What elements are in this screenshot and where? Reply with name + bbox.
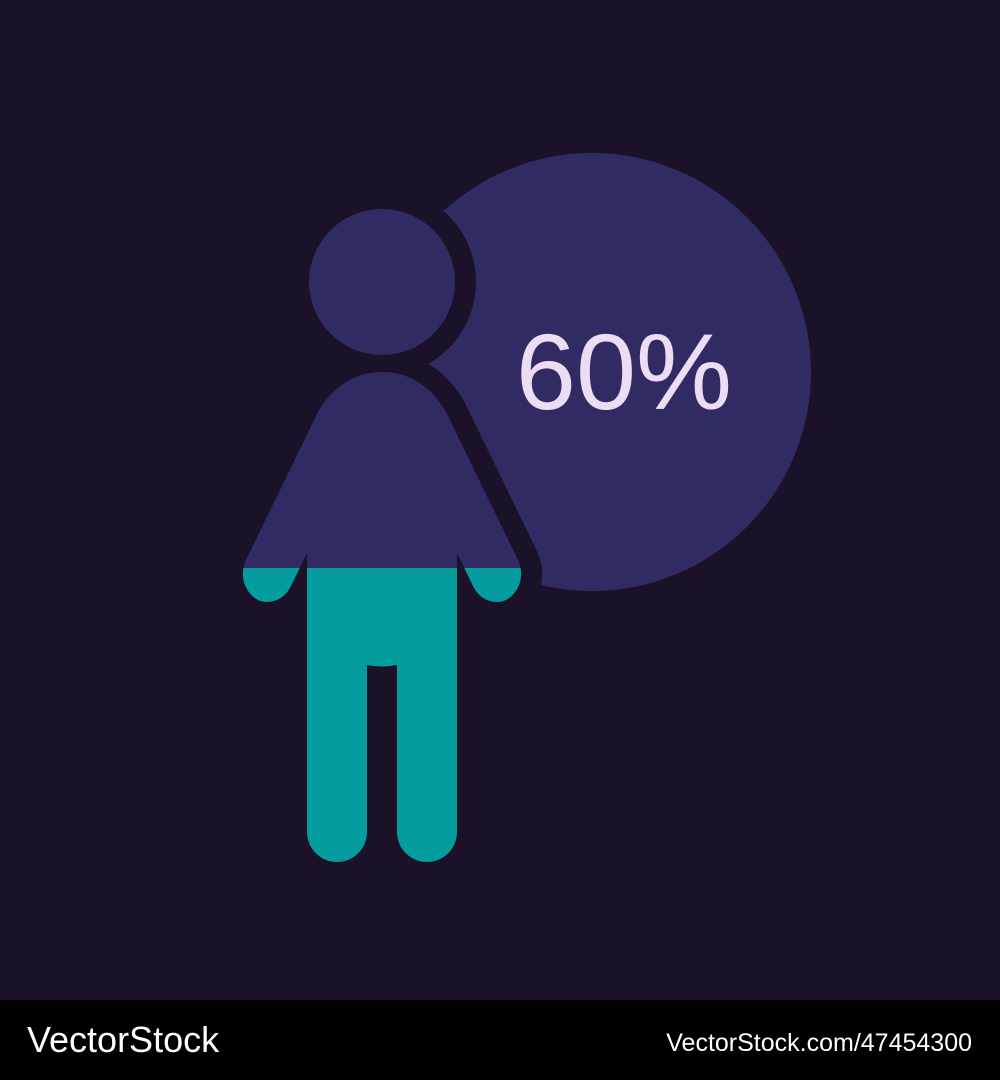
- footer bar: VectorStock: [27, 1019, 220, 1060]
- footer bar: [0, 1000, 1000, 1080]
- footer bar: VectorStock.com/47454300: [666, 1029, 972, 1057]
- percentage label: 60%: [516, 311, 732, 432]
- chart: pie circle: [373, 153, 811, 591]
- icon: person figure: [243, 209, 521, 862]
